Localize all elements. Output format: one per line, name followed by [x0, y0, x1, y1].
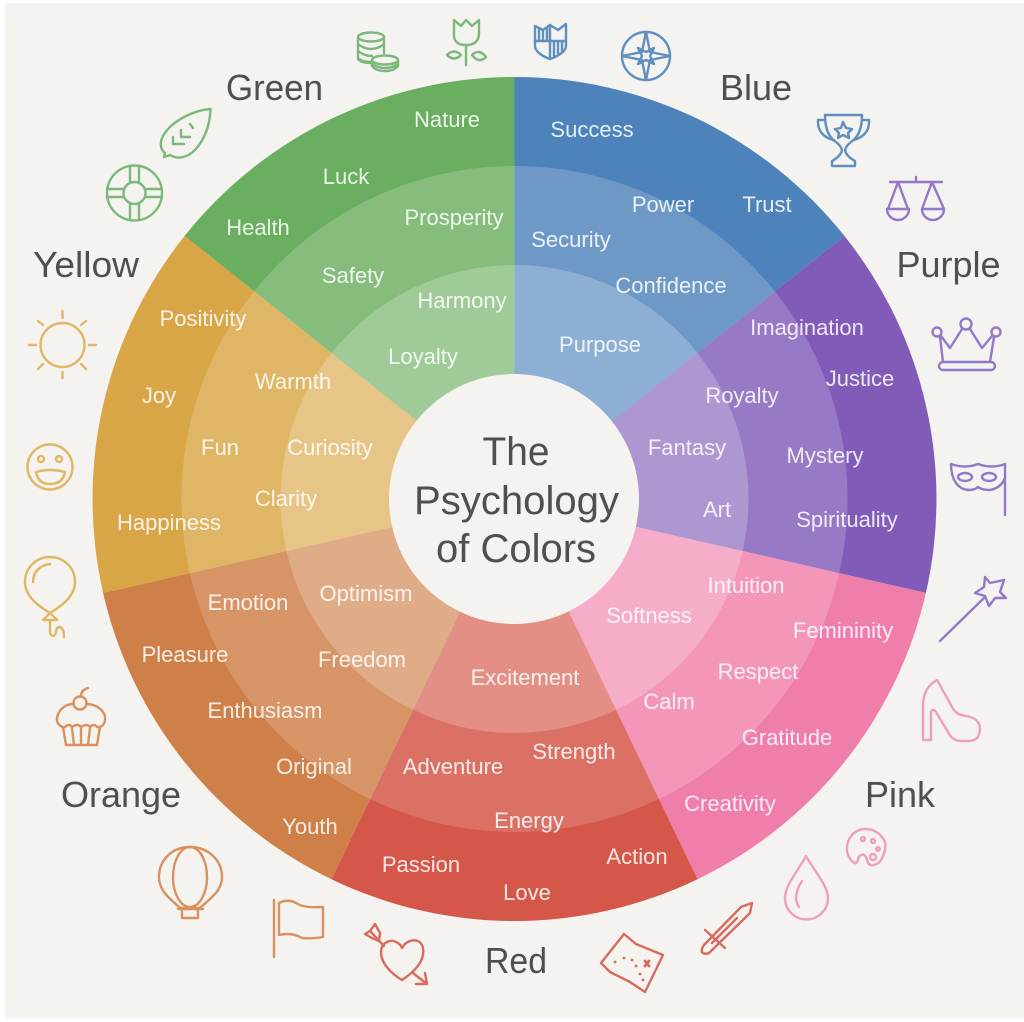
- panel: pink sector: Respect: [718, 659, 798, 684]
- icon: crown: [932, 318, 1000, 370]
- icon: treasure map: [601, 934, 663, 992]
- title: The: [482, 430, 550, 474]
- panel: orange sector: Optimism: [320, 581, 412, 606]
- panel: pink sector: Intuition: [707, 573, 785, 598]
- heading: Red: Red: [485, 940, 547, 981]
- center circle: [389, 374, 639, 624]
- icon: water drop: [785, 856, 828, 920]
- icon: sword: [702, 903, 752, 954]
- panel: green sector: Loyalty: [388, 344, 458, 369]
- panel: blue sector: Purpose: [559, 332, 641, 357]
- panel: green sector: Harmony: [417, 288, 507, 313]
- panel: red sector: Love: [503, 880, 551, 905]
- icon: party balloon: [25, 557, 75, 637]
- icon: flag: [274, 900, 323, 957]
- panel: green sector: Luck: [323, 164, 370, 189]
- panel: red sector: Action: [606, 844, 668, 869]
- panel: orange sector: Original: [276, 754, 352, 779]
- panel: purple sector: Justice: [826, 366, 894, 391]
- panel: purple sector: Royalty: [705, 383, 779, 408]
- icon: trophy: [818, 115, 869, 166]
- icon: cupcake: [57, 688, 105, 745]
- panel: orange sector: Youth: [282, 814, 338, 839]
- panel: pink sector: Softness: [606, 603, 692, 628]
- panel: green sector: Prosperity: [404, 205, 504, 230]
- panel: purple sector: [514, 236, 936, 593]
- panel: blue sector: Power: [632, 192, 694, 217]
- panel: pink sector: Femininity: [793, 618, 893, 643]
- panel: red sector: [331, 499, 698, 921]
- icon: smiley: [28, 444, 72, 490]
- panel: yellow sector: Clarity: [255, 486, 317, 511]
- icon: mask: [951, 464, 1005, 515]
- panel: red sector: Excitement: [471, 665, 579, 690]
- color wheel: [93, 77, 936, 921]
- panel: yellow sector: Joy: [142, 383, 176, 408]
- icon: palette: [847, 829, 885, 865]
- panel: purple sector: Mystery: [786, 443, 864, 468]
- panel: green sector: Safety: [322, 263, 384, 288]
- panel: purple sector: Spirituality: [796, 507, 898, 532]
- panel: yellow sector: Warmth: [255, 369, 331, 394]
- heading: Orange: Orange: [61, 774, 181, 815]
- panel: blue sector: Security: [531, 227, 611, 252]
- panel: purple sector: Fantasy: [648, 435, 726, 460]
- icon: tulip: [447, 20, 486, 65]
- icon: leaf: [161, 109, 210, 158]
- title: Psychology: [414, 479, 619, 523]
- heading: Blue: Blue: [720, 67, 792, 108]
- panel: red sector: Adventure: [403, 754, 503, 779]
- icon: shield: [535, 24, 566, 59]
- icon: hot air balloon: [159, 847, 222, 918]
- panel: red sector: Passion: [382, 852, 460, 877]
- panel: orange sector: [103, 499, 514, 879]
- icon: compass: [622, 32, 670, 80]
- panel: green sector: Nature: [414, 107, 480, 132]
- icon: high heel: [923, 680, 980, 741]
- icon: lifebuoy: [107, 166, 162, 220]
- panel: blue sector: Success: [550, 117, 634, 142]
- panel: blue sector: Confidence: [615, 273, 727, 298]
- title: [414, 430, 619, 571]
- heading: Yellow: Yellow: [33, 244, 140, 285]
- icon: scales: [887, 177, 944, 220]
- panel: pink sector: Creativity: [684, 791, 776, 816]
- panel: green sector: Health: [226, 215, 290, 240]
- panel: yellow sector: Positivity: [160, 306, 246, 331]
- panel: orange sector: Pleasure: [142, 642, 228, 667]
- panel: pink sector: Calm: [643, 689, 695, 714]
- icon: magic wand: [940, 577, 1006, 641]
- icon: heart with arrow: [365, 924, 427, 984]
- icon: sun: [29, 311, 96, 378]
- panel: red sector: Energy: [494, 808, 564, 833]
- heading: Purple: Purple: [896, 244, 1001, 285]
- panel: orange sector: Emotion: [208, 590, 288, 615]
- panel: pink sector: Gratitude: [742, 725, 832, 750]
- panel: red sector: Strength: [532, 739, 616, 764]
- panel: blue sector: [514, 77, 844, 499]
- panel: orange sector: Enthusiasm: [208, 698, 322, 723]
- heading: Pink: Pink: [865, 774, 936, 815]
- heading: Green: Green: [226, 67, 323, 108]
- panel: yellow sector: [93, 236, 514, 593]
- panel: blue sector: Trust: [742, 192, 792, 217]
- panel: purple sector: Art: [703, 497, 731, 522]
- panel: pink sector: [514, 499, 926, 879]
- panel: yellow sector: Happiness: [117, 510, 221, 535]
- panel: yellow sector: Curiosity: [287, 435, 373, 460]
- panel: yellow sector: Fun: [201, 435, 239, 460]
- panel: purple sector: Imagination: [750, 315, 864, 340]
- panel: green sector: [185, 77, 514, 499]
- title: of Colors: [436, 527, 596, 571]
- icon: coins: [358, 32, 398, 71]
- panel: orange sector: Freedom: [318, 647, 406, 672]
